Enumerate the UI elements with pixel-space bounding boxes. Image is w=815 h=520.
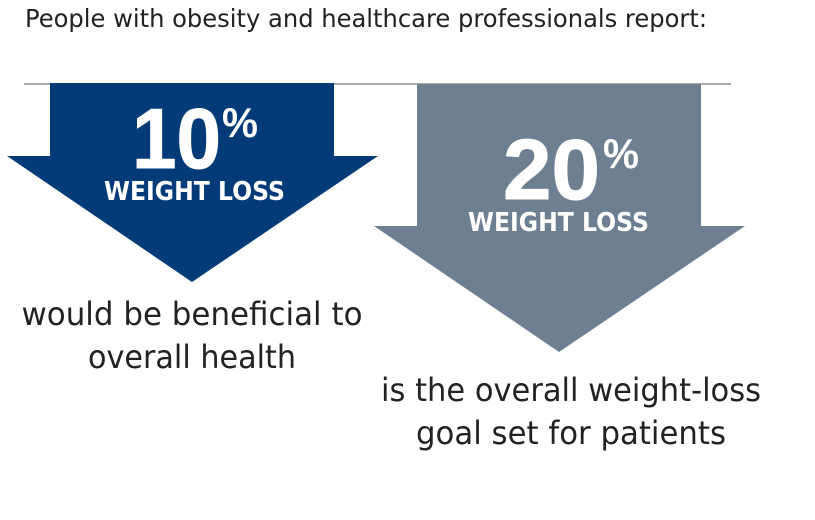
percent sign: % [222, 99, 258, 146]
caption: 10%: would be beneficial to [22, 295, 362, 333]
intro text: People with obesity and healthcare professionals report: [25, 4, 707, 33]
caption: 20%: goal set for patients [416, 414, 726, 452]
caption: 20%: is the overall weight-loss [381, 371, 761, 409]
percent sign: % [603, 130, 639, 177]
arrow: 10% weight loss [7, 83, 378, 282]
caption: 10% [22, 295, 362, 376]
divider line [24, 83, 731, 85]
number: 10: 10 [132, 92, 221, 187]
arrow shape: navy [7, 83, 378, 282]
caption: 10%: overall health [88, 338, 296, 376]
number: 20: 20 [503, 123, 600, 218]
caption: 20% [381, 371, 761, 452]
arrow shape: slate [374, 84, 745, 352]
label: weight loss: WEIGHT LOSS [104, 177, 285, 207]
label: weight loss: WEIGHT LOSS [468, 208, 649, 238]
arrow: 20% weight loss [374, 84, 745, 352]
